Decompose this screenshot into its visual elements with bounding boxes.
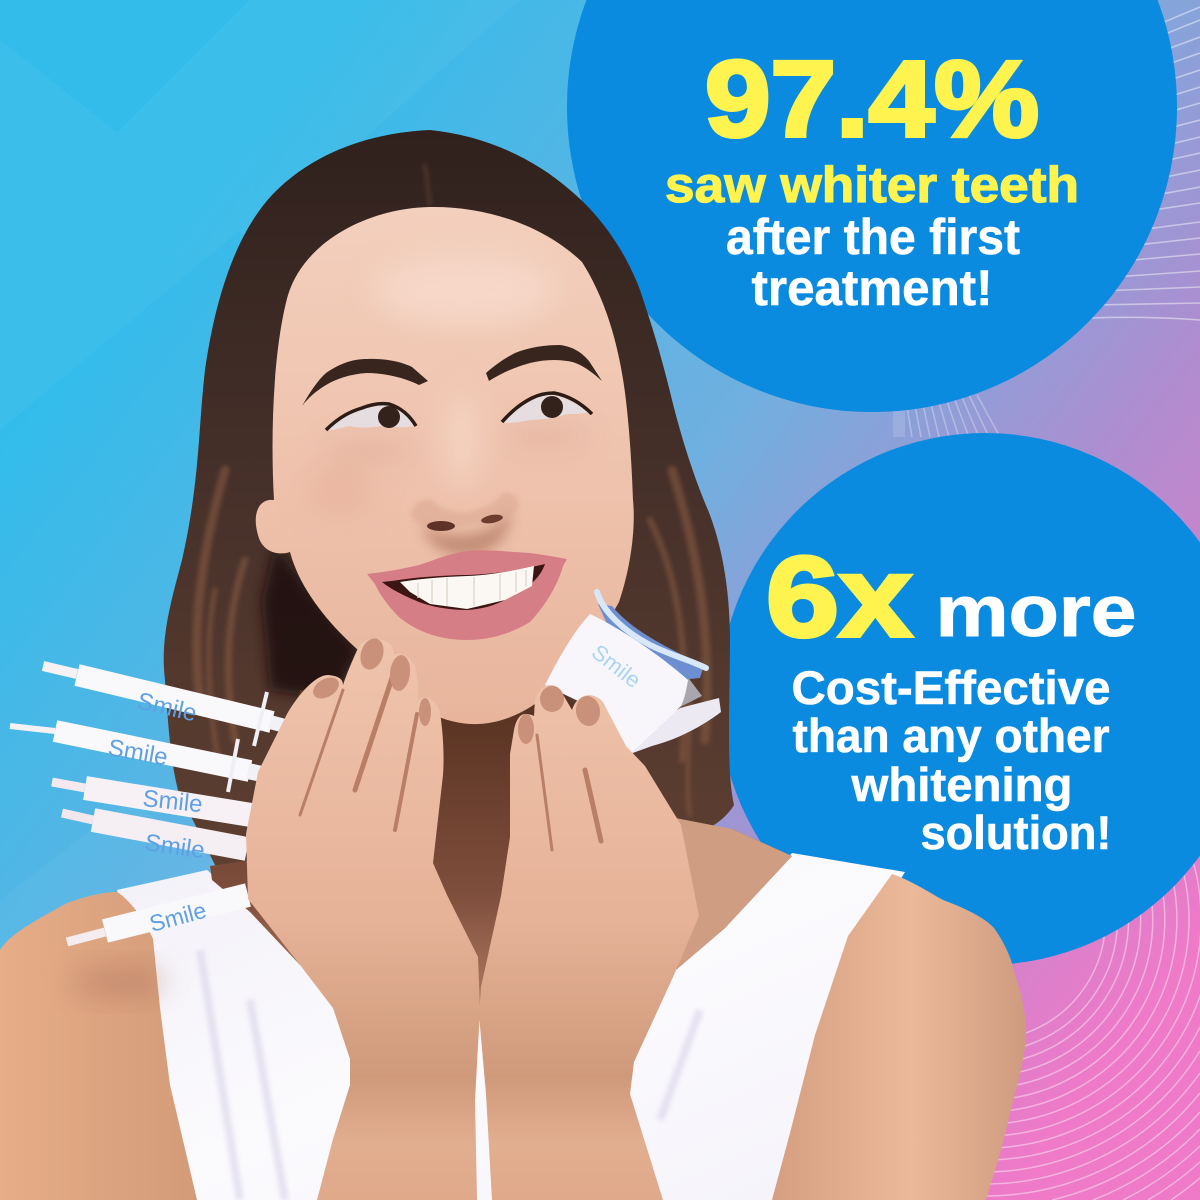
lips	[367, 550, 567, 640]
syringe 2: Smile	[106, 734, 170, 771]
top fabric folds	[200, 950, 700, 1200]
neck and chest	[210, 690, 792, 1030]
syringe 1: Smile	[135, 688, 199, 727]
syringe 5: Smile	[147, 897, 209, 937]
caption line 1: Cost-Effective	[792, 661, 1110, 714]
whitening tray	[545, 592, 721, 754]
eyebrow left	[302, 359, 428, 406]
tray lower flange	[630, 698, 721, 754]
left hand nails	[309, 635, 431, 726]
syringe 4: Smile	[143, 829, 206, 864]
chest lit skin	[660, 815, 792, 969]
tray logo: Smile	[587, 639, 646, 693]
right hand nails	[518, 686, 602, 744]
lower wave fragment	[893, 395, 1000, 437]
top right line pattern	[1090, 7, 1200, 320]
stat value: 97.4%	[705, 38, 1039, 159]
syringes	[10, 666, 285, 942]
tooth gaps	[418, 570, 526, 606]
left shoulder and arm	[0, 892, 197, 1200]
stat value 6x: 6x	[766, 534, 912, 661]
tray white body	[545, 614, 688, 754]
caption line 3: whitening	[850, 758, 1072, 811]
syringe 4	[62, 813, 247, 864]
white sleeveless top	[117, 853, 905, 1200]
word more: more	[936, 572, 1136, 652]
woman portrait	[0, 130, 1026, 1200]
caption line 2: than any other	[792, 709, 1110, 762]
concentric arc pattern	[985, 824, 1200, 1200]
tray clear rim	[597, 592, 706, 668]
face shading	[304, 255, 587, 518]
caption line 4: solution!	[920, 806, 1112, 859]
teeth	[400, 566, 534, 609]
syringe 1	[43, 666, 285, 746]
smile	[367, 550, 567, 640]
right hand finger creases	[537, 735, 601, 850]
hair highlights	[197, 165, 707, 815]
right shoulder and arm	[772, 874, 1026, 1200]
stat caption line 2: treatment!	[752, 260, 992, 316]
syringe 3: Smile	[141, 785, 204, 818]
mouth opening	[382, 564, 545, 610]
syringe 2	[10, 726, 262, 792]
left hand	[246, 639, 480, 1200]
decorative background facets	[0, 0, 520, 1000]
stat caption line 1: after the first	[726, 209, 1020, 265]
tray grey back	[678, 672, 702, 708]
stat circle: 97.4%	[567, 0, 1177, 412]
shoulder shadow	[70, 966, 166, 998]
hair	[164, 130, 734, 865]
tray blue light strip	[598, 604, 704, 680]
left hand finger creases	[300, 675, 417, 830]
eye left	[326, 404, 416, 430]
syringe 3	[52, 782, 251, 818]
stat caption highlight: saw whiter teeth	[665, 157, 1079, 213]
dark shadow under jaw	[262, 545, 360, 700]
eye right	[502, 393, 592, 423]
nose	[411, 492, 519, 556]
stat circle: 6x more	[719, 433, 1200, 965]
right hand	[479, 685, 699, 1200]
eyebrow right	[486, 345, 602, 381]
syringe 5	[67, 895, 248, 942]
face	[256, 207, 634, 724]
